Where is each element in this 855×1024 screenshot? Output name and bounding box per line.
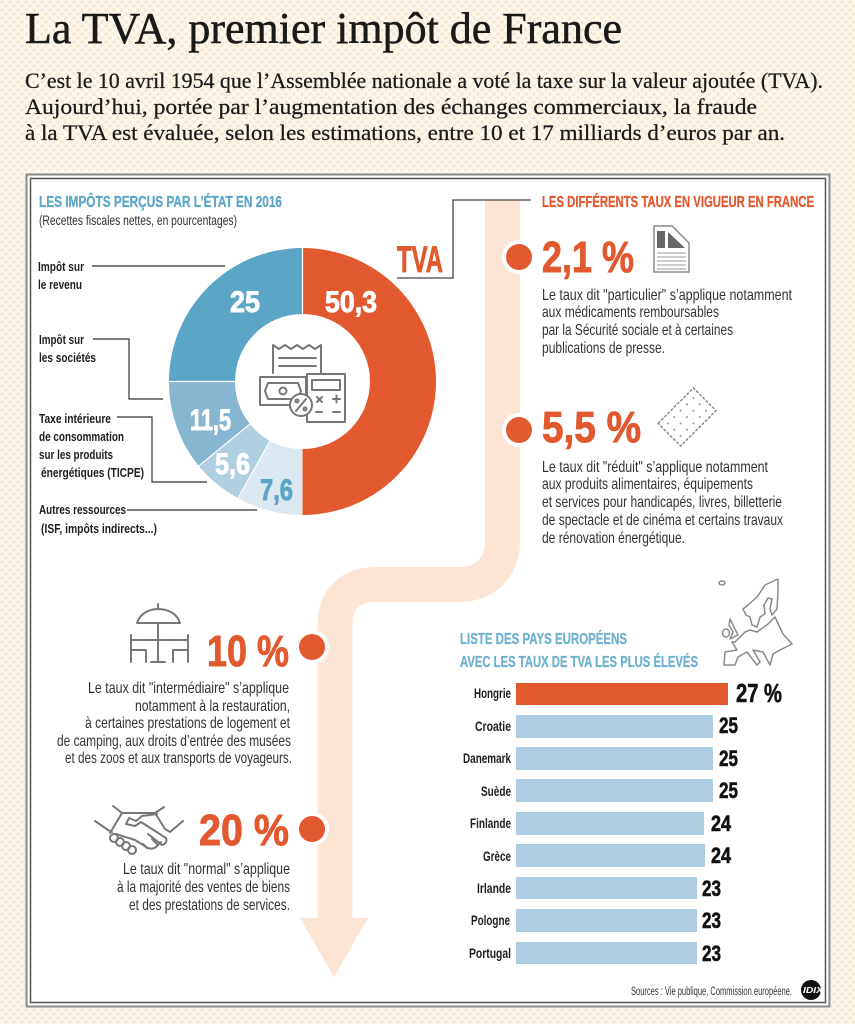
rate 20 % <box>117 806 329 914</box>
heading: European countries: LISTE DES PAYS EUROPÉENS <box>460 629 627 648</box>
bar chart: VAT rates: 23 <box>702 876 721 901</box>
rate 20 %: 20 % <box>199 806 289 855</box>
bar chart: VAT rates: Irlande <box>477 880 511 896</box>
donut label: TICPE <box>39 411 207 482</box>
icon: document <box>654 226 689 272</box>
bar chart: VAT rates: 25 <box>719 713 738 738</box>
icon: handshake <box>95 806 183 854</box>
rate 2,1 %: aux médicaments remboursables <box>542 304 719 321</box>
bar chart: VAT rates <box>463 678 782 966</box>
donut label: other resources: Autres ressources <box>39 502 126 517</box>
bar chart: VAT rates: Pologne <box>471 912 510 928</box>
TVA label and connector <box>397 200 531 280</box>
rate 10 %: notamment à la restauration, <box>135 698 290 715</box>
donut chart <box>169 248 436 515</box>
panel frame <box>26 174 830 1006</box>
donut label: corporate tax: les sociétés <box>39 350 96 365</box>
rate 2,1 %: Le taux dit "particulier" s’applique notamment <box>542 287 792 304</box>
donut label: corporate tax: Impôt sur <box>39 332 84 347</box>
heading: taxes collected: LES IMPÔTS PERÇUS PAR L’ÉTAT EN 2016 <box>39 192 282 211</box>
intro text: C’est le 10 avril 1954 que l’Assemblée nationale a voté la taxe sur la valeur ajoutée (TVA). <box>25 68 823 93</box>
icon: terrace table <box>131 604 188 662</box>
icon: biscuit <box>658 388 716 446</box>
rate 20 %: et des prestations de services. <box>129 897 290 914</box>
donut label: TICPE: Taxe intérieure <box>39 411 111 426</box>
donut label: corporate tax <box>39 332 163 399</box>
rate 20 %: Le taux dit "normal" s’applique <box>123 861 290 878</box>
bar chart: VAT rates: Portugal <box>469 945 511 961</box>
bar chart: VAT rates: 24 <box>711 843 732 868</box>
heading: European countries <box>460 629 698 671</box>
rate 2,1 %: par la Sécurité sociale et à certaines <box>542 322 733 339</box>
icon: receipt, banknote and calculator <box>260 345 345 422</box>
TVA label and connector: TVA <box>397 239 443 280</box>
rate 5,5 %: 5,5 % <box>542 403 641 452</box>
rate 2,1 %: 2,1 % <box>542 233 634 282</box>
rate 2,1 %: publications de presse. <box>542 340 665 357</box>
rate 20 %: à la majorité des ventes de biens <box>117 879 290 896</box>
intro text: à la TVA est évaluée, selon les estimations, entre 10 et 17 milliards d’euros par an. <box>25 120 785 145</box>
bar chart: VAT rates: 27 % <box>736 678 782 708</box>
heading: European countries: AVEC LES TAUX DE TVA LES PLUS ÉLEVÉS <box>460 652 698 671</box>
icon: map of Europe <box>719 579 792 665</box>
rate 2,1 % <box>502 233 792 357</box>
bar chart: VAT rates: 25 <box>719 778 738 803</box>
donut chart: 25 <box>230 286 260 319</box>
bar chart: VAT rates: Danemark <box>463 750 511 766</box>
rate 5,5 %: et services pour handicapés, livres, billetterie <box>542 494 782 511</box>
title: La TVA, premier impôt de France <box>25 4 622 53</box>
donut label: other resources: (ISF, impôts indirects...) <box>41 521 157 536</box>
rate 5,5 %: Le taux dit "réduit" s’applique notamment <box>542 459 768 476</box>
rate 5,5 % <box>502 403 783 547</box>
rate 10 %: 10 % <box>207 627 289 676</box>
rate 10 %: et des zoos et aux transports de voyageurs. <box>65 750 292 767</box>
bar chart: VAT rates: Finlande <box>470 815 511 831</box>
heading: taxes collected <box>39 192 282 228</box>
intro text: Aujourd’hui, portée par l’augmentation des échanges commerciaux, la fraude <box>25 94 757 119</box>
donut chart: 50,3 <box>325 286 377 319</box>
donut chart: 5,6 <box>215 448 250 481</box>
rate 10 %: Le taux dit "intermédiaire" s’applique <box>88 680 289 697</box>
bar chart: VAT rates: Grèce <box>483 848 511 864</box>
rate 5,5 %: aux produits alimentaires, équipements <box>542 476 753 493</box>
bar chart: VAT rates: Hongrie <box>474 685 511 701</box>
rate 5,5 %: de rénovation énergétique. <box>542 530 685 547</box>
donut label: income tax: Impôt sur <box>38 259 84 274</box>
donut label: other resources <box>39 502 257 536</box>
bar chart: VAT rates: 24 <box>711 811 732 836</box>
rate 10 %: de camping, aux droits d’entrée des musées <box>57 733 291 750</box>
donut label: TICPE: de consommation <box>39 429 124 444</box>
bar chart: VAT rates: 23 <box>702 941 721 966</box>
donut label: TICPE: sur les produits <box>39 447 113 462</box>
arrow: TVA flow <box>300 200 502 977</box>
donut label: income tax <box>38 259 225 292</box>
rate 10 %: à certaines prestations de logement et <box>85 715 290 732</box>
bar chart: VAT rates: Suède <box>481 783 511 799</box>
rate 10 % <box>57 627 329 767</box>
logo: IDIX <box>801 980 824 1000</box>
logo: IDIX: IDIX <box>803 986 824 995</box>
donut chart: 7,6 <box>260 474 293 507</box>
donut chart: 11,5 <box>190 404 231 437</box>
bar chart: VAT rates: 23 <box>702 908 721 933</box>
bar chart: VAT rates: Croatie <box>475 718 511 734</box>
heading: taxes collected: (Recettes fiscales nettes, en pourcentages) <box>39 213 237 228</box>
donut label: income tax: le revenu <box>38 277 82 292</box>
intro text <box>25 68 823 145</box>
donut label: TICPE: énergétiques (TICPE) <box>41 465 144 480</box>
bar chart: VAT rates: 25 <box>719 746 738 771</box>
rate 5,5 %: de spectacle et de cinéma et certains travaux <box>542 512 783 529</box>
